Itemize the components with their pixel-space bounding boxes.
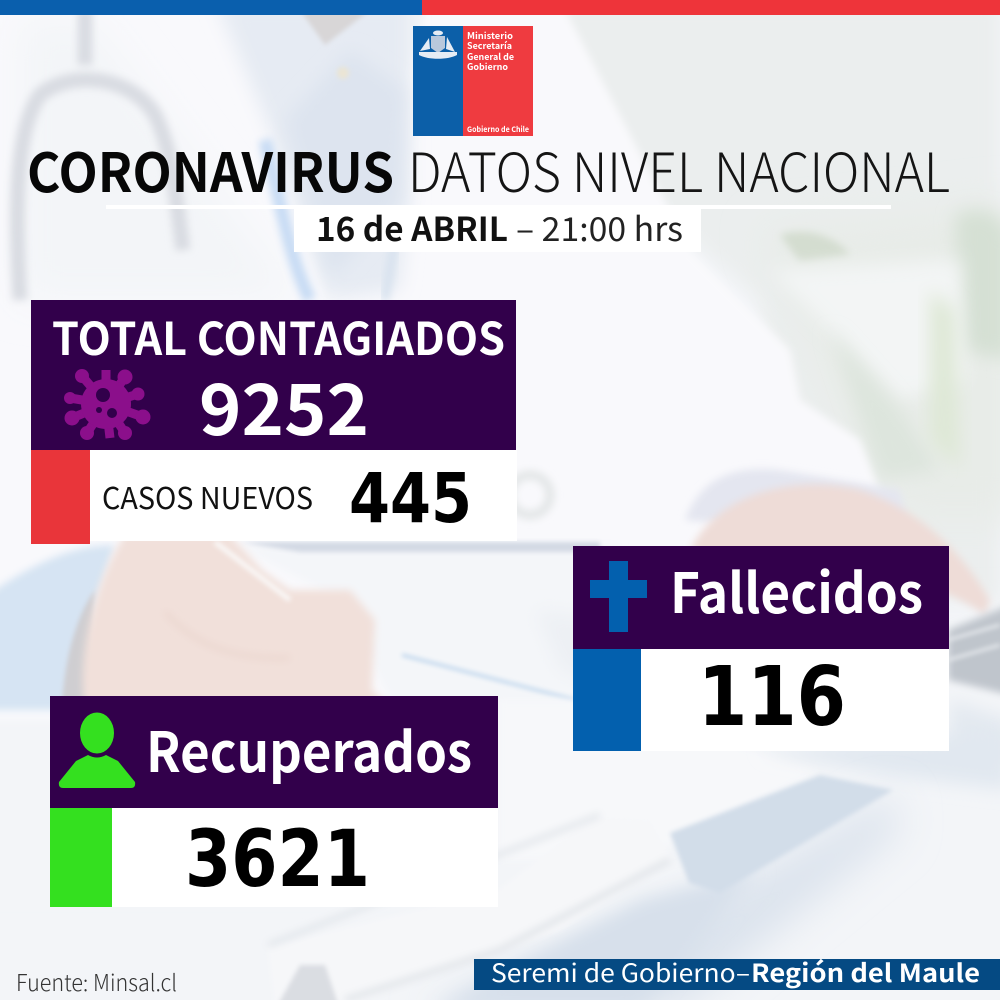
panel: fallecidos [573, 546, 949, 751]
clipboard shadow [420, 795, 900, 1000]
title [27, 129, 950, 208]
title: DATOS NIVEL NACIONAL [408, 129, 950, 208]
logo text: General de [467, 50, 514, 63]
top colour bar [0, 0, 1000, 15]
footer credit: Seremi de Gobierno– [491, 954, 750, 990]
icon: cross [590, 561, 647, 632]
cuff and right hand [685, 469, 910, 540]
title: CORONAVIRUS [27, 129, 394, 208]
number: 445: 445 [349, 459, 472, 539]
date box [294, 203, 701, 252]
logo: Gobierno de Chile [413, 26, 533, 136]
paper and clipboard [0, 760, 1000, 1000]
stethoscope tubes [17, 10, 183, 300]
logo text: Gobierno de Chile [467, 124, 530, 135]
pen line [402, 655, 575, 700]
number: 3621: 3621 [185, 815, 370, 905]
keyboard [948, 605, 1000, 695]
room behind, top right [420, 0, 1000, 600]
lab coat [0, 0, 890, 720]
title underline [106, 205, 891, 209]
source note: Fuente: Minsal.cl [16, 964, 177, 998]
icon: virus [64, 369, 150, 440]
date box: – 21:00 hrs [516, 203, 683, 251]
number: 116: 116 [698, 650, 846, 745]
logo text [467, 29, 530, 135]
number: 9252: 9252 [199, 354, 369, 456]
label: casos nuevos: CASOS NUEVOS [102, 474, 313, 518]
heading: fallecidos: Fallecidos [670, 549, 923, 629]
clipboard clip [670, 775, 893, 893]
logo text: Gobierno [467, 60, 508, 73]
heading: recuperados: Recuperados [146, 708, 472, 788]
shirt and tie [215, 0, 410, 300]
date box: 16 de ABRIL [316, 203, 508, 251]
logo text: Secretaría [467, 39, 512, 52]
footer credit: Región del Maule [751, 954, 980, 990]
icon: person [59, 712, 135, 788]
logo text: Ministerio [467, 29, 513, 42]
desk [235, 545, 620, 720]
panel: recuperados [50, 696, 498, 907]
icon: coat of arms [419, 30, 457, 59]
panel: total contagiados [31, 300, 517, 544]
heading: total contagiados: TOTAL CONTAGIADOS [52, 303, 505, 368]
footer credit [474, 954, 1000, 990]
left sleeve and hand [0, 545, 115, 710]
